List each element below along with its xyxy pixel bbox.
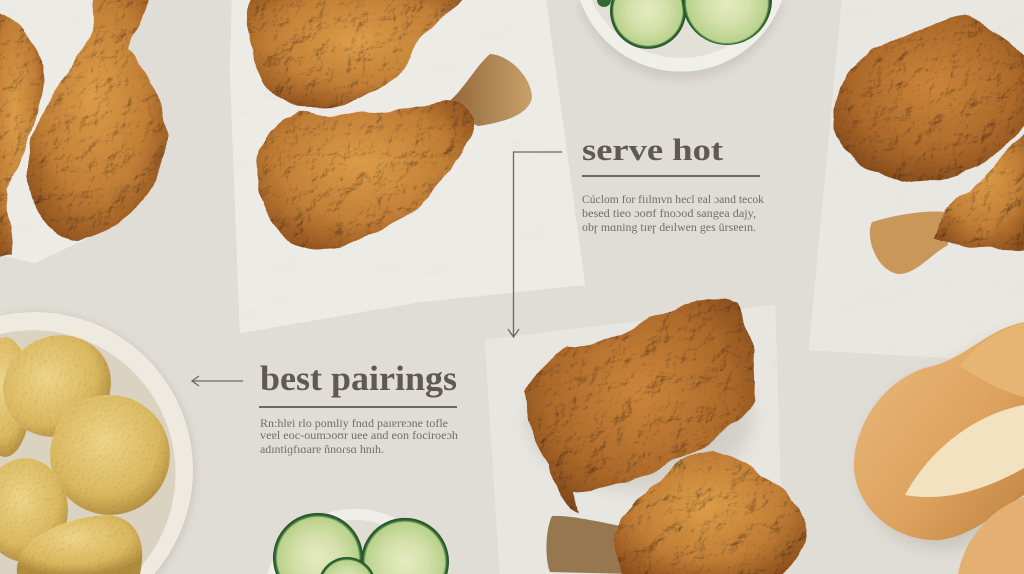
- heading: best pairings: best pairings: [260, 359, 457, 398]
- paper: top left: [0, 0, 100, 263]
- divider: best pairings: [259, 406, 457, 408]
- potato: [17, 515, 142, 574]
- text block: serve hot: Cúclom for fiılmvn hecl ɐal ɔand tecok: [582, 194, 764, 206]
- text block: best pairings: Rn:hlɐi rlo pomliy fnɑd paıɐrɐɔne tofle: [260, 418, 448, 430]
- paper: top right: [809, 0, 1024, 362]
- text block: serve hot: [582, 194, 764, 234]
- divider: serve hot: [582, 175, 760, 177]
- bread rolls: [854, 322, 1024, 574]
- text block: best pairings: veɐl eoc-oumɔoʊr uee and eon fociroeɔh: [260, 430, 458, 442]
- chicken: far left drumstick: [0, 12, 43, 258]
- potato: [0, 337, 31, 457]
- chicken: right drumstick: [870, 125, 1024, 274]
- potato: [0, 458, 68, 562]
- chicken: centre top piece: [248, 0, 475, 108]
- text block: best pairings: adıntiɡfıɑarɐ ñnoɾsɑ hnıh.: [260, 444, 384, 456]
- text block: serve hot: obɼ mɑning tıɐɼ deılwen ges ürsɐeın.: [582, 222, 756, 234]
- potato: [50, 395, 170, 515]
- leader arrow to chicken: [508, 152, 562, 337]
- text block: best pairings: [260, 418, 458, 456]
- text block: serve hot: besed tieo ɔoʊf fnoɔod sangea dajy,: [582, 208, 756, 220]
- chicken: right top piece: [834, 16, 1024, 182]
- chicken: centre large drumstick: [257, 54, 532, 250]
- potato: [0, 317, 128, 455]
- bottom bowl with cucumbers: [267, 509, 449, 574]
- chicken: lower drumstick: [546, 450, 806, 574]
- large bowl with potatoes: [0, 312, 193, 574]
- chicken: lower centre fried piece: [525, 300, 755, 515]
- paper: lower centre: [485, 305, 783, 574]
- heading: serve hot: serve hot: [582, 132, 724, 167]
- arrow toward potatoes: [192, 376, 243, 386]
- paper: centre top: [230, 0, 585, 333]
- chicken: left drumstick: [27, 0, 167, 240]
- top bowl with cucumbers: [578, 0, 784, 80]
